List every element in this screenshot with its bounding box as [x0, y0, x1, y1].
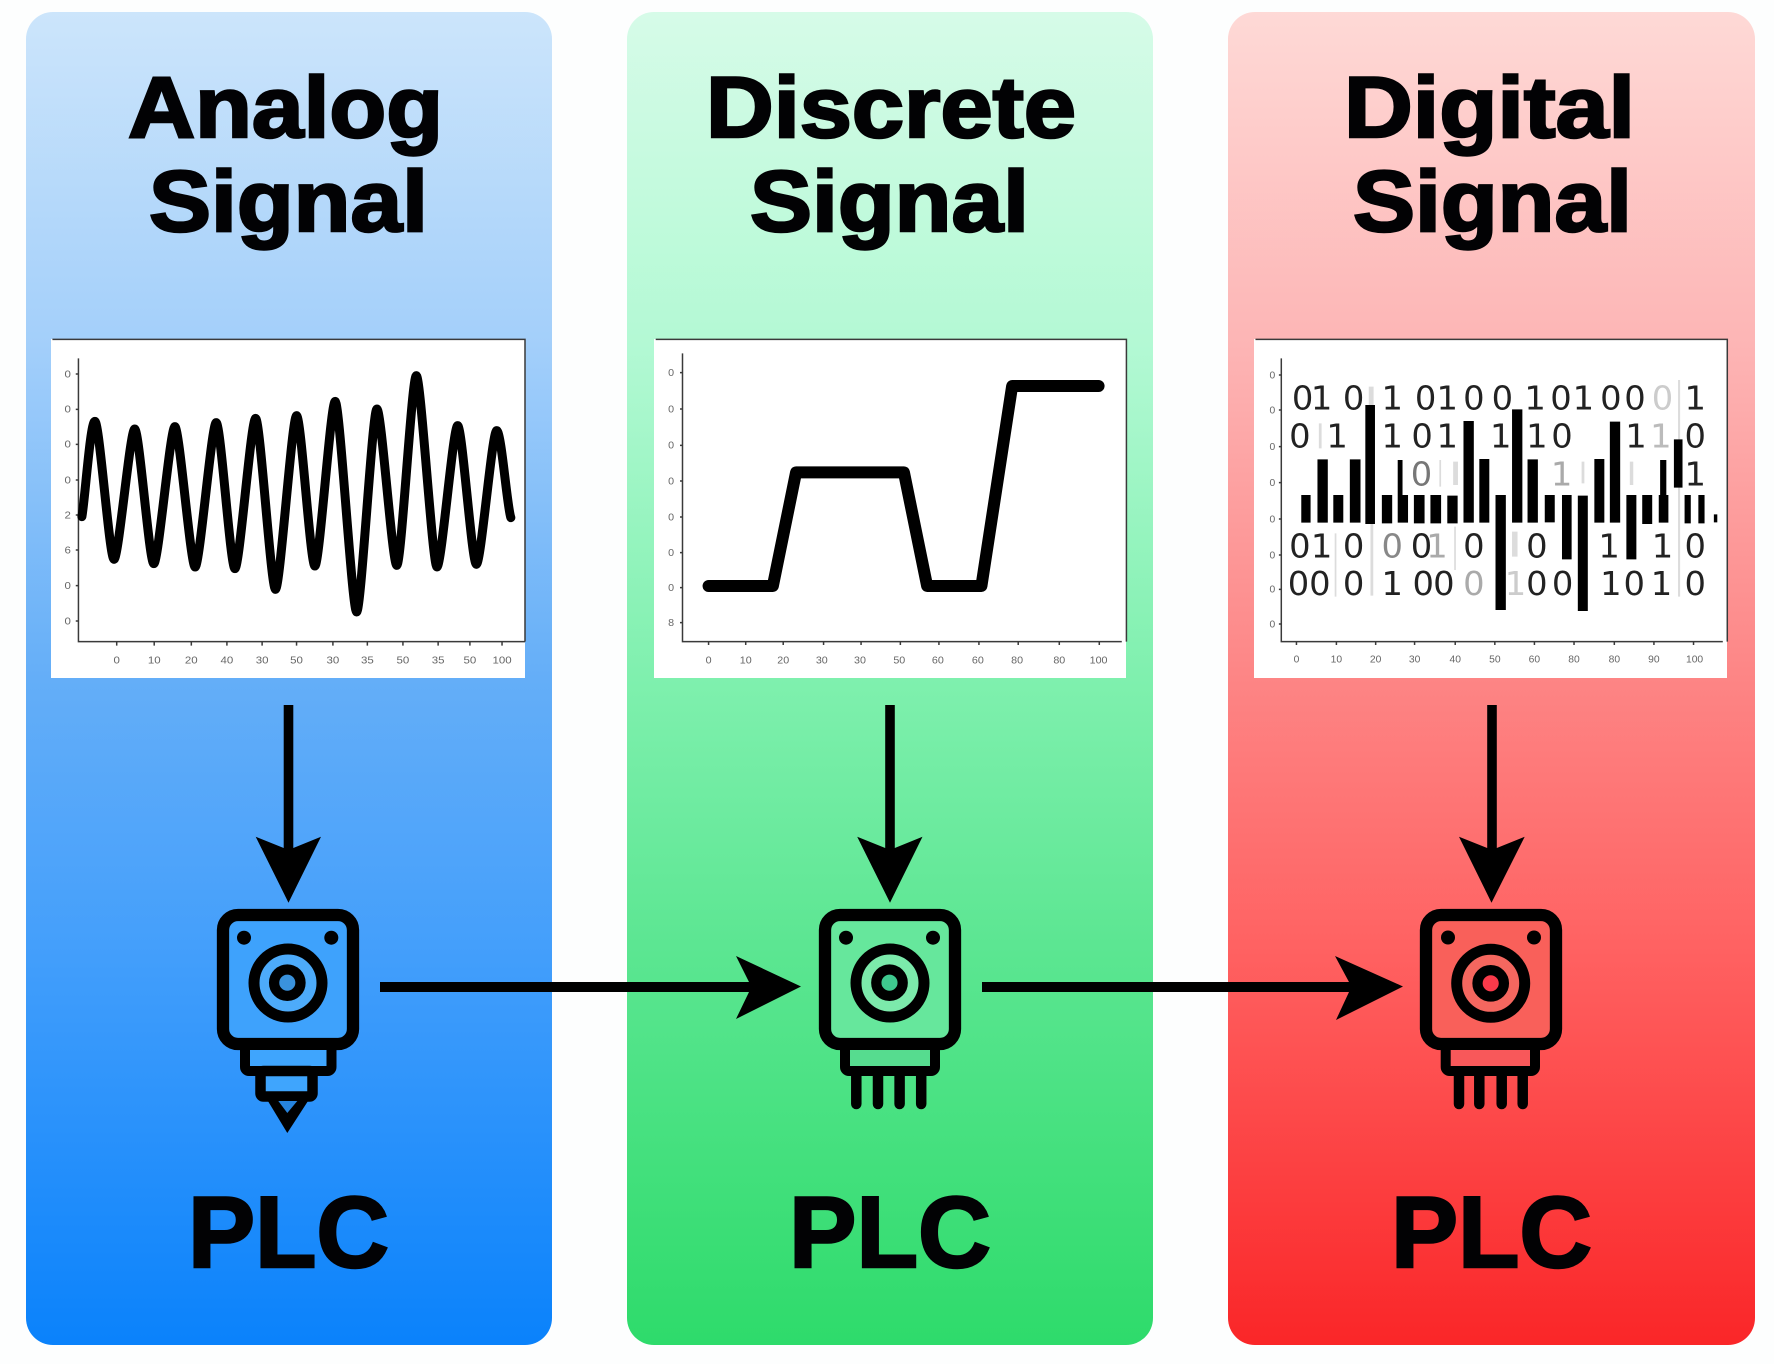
- chart: digital bits and bars: 0: [1269, 585, 1276, 596]
- chart: analog waveform: 0: [65, 439, 71, 450]
- chart: digital bits and bars: 0: [1269, 442, 1276, 453]
- chart: digital bits and bars: 20: [1370, 655, 1382, 666]
- chart: digital bits and bars: [1254, 339, 1727, 678]
- chart: digital bits and bars: 0: [1269, 514, 1276, 525]
- chart: discrete step signal: 0: [668, 548, 674, 559]
- chart: analog waveform: 50: [290, 655, 303, 666]
- chart: analog waveform: 2: [65, 510, 71, 521]
- chart: discrete step signal: 0: [706, 656, 712, 666]
- chart: analog waveform: [51, 339, 525, 678]
- chart: digital bits and bars: 60: [1529, 655, 1541, 666]
- chart: digital bits and bars: 0: [1269, 370, 1276, 381]
- icon: digital PLC module: [1426, 915, 1556, 1104]
- chart: discrete step signal: 60: [932, 656, 944, 666]
- chart: analog waveform: 10: [148, 655, 161, 666]
- chart: digital bits and bars: 1: [1551, 455, 1572, 494]
- heading: Digital Signal: Signal: [1353, 154, 1632, 250]
- chart: digital bits and bars: 0: [1463, 565, 1485, 603]
- chart: analog waveform: 0: [114, 655, 120, 666]
- chart: discrete step signal: 0: [668, 405, 674, 415]
- chart: digital bits and bars: 0: [1269, 405, 1276, 416]
- chart: discrete step signal: 30: [854, 656, 866, 666]
- arrow: discrete PLC to digital PLC: [982, 956, 1403, 1020]
- chart: digital bits and bars: 30: [1409, 655, 1421, 666]
- chart: digital bits and bars: 0110111010: [1289, 417, 1706, 455]
- chart: discrete step signal: 80: [1053, 656, 1065, 666]
- chart: analog waveform: 35: [361, 655, 374, 666]
- chart: digital bits and bars: 010000110: [1289, 527, 1706, 566]
- chart: discrete step signal: 80: [1011, 656, 1023, 666]
- heading: Analog Signal: Analog: [128, 60, 443, 156]
- chart: analog waveform: 30: [327, 655, 339, 666]
- chart: discrete step signal: 30: [816, 656, 828, 666]
- chart: digital bits and bars: 80: [1609, 655, 1620, 666]
- chart: digital bits and bars: 1: [1505, 565, 1526, 603]
- chart: discrete step signal: 20: [777, 656, 789, 666]
- chart: discrete step signal: 8: [668, 618, 674, 629]
- arrow: discrete chart to PLC: [857, 705, 922, 903]
- chart: digital bits and bars: 90: [1648, 655, 1660, 666]
- chart: digital bits and bars: 0: [1269, 619, 1276, 630]
- chart: digital bits and bars: 80: [1568, 655, 1580, 666]
- arrow: analog chart to PLC: [256, 705, 321, 903]
- chart: digital bits and bars: 0: [1269, 478, 1276, 489]
- heading: Discrete Signal: Signal: [750, 154, 1029, 250]
- heading: Analog Signal: [128, 60, 443, 250]
- chart: digital bits and bars: 1: [1426, 527, 1448, 566]
- chart: digital bits and bars: 1: [1650, 417, 1672, 455]
- chart: digital bits and bars: 50: [1489, 655, 1501, 666]
- heading: Analog Signal: Signal: [149, 154, 428, 250]
- icon: analog PLC module: [223, 915, 353, 1133]
- chart: analog waveform: 30: [256, 655, 269, 666]
- panel: analog signal: [26, 12, 552, 1345]
- label: PLC discrete: PLC: [789, 1177, 991, 1289]
- chart: digital bits and bars: 0: [1294, 655, 1300, 666]
- label: PLC analog: PLC: [188, 1177, 389, 1289]
- chart: digital bits and bars: 10: [1331, 655, 1343, 666]
- chart: analog waveform: 35: [432, 655, 445, 666]
- chart: discrete step signal: 0: [668, 441, 674, 452]
- chart: analog waveform: 40: [221, 655, 233, 666]
- arrow: digital chart to PLC: [1459, 705, 1525, 903]
- chart: discrete step signal: 0: [668, 368, 674, 379]
- heading: Digital Signal: Digital: [1344, 60, 1635, 156]
- chart: discrete step signal: 0: [668, 513, 674, 523]
- chart: analog waveform: 50: [464, 655, 476, 666]
- chart: discrete step signal: 60: [972, 656, 984, 666]
- label: PLC digital: PLC: [1391, 1177, 1592, 1289]
- chart: discrete step signal: 10: [740, 656, 752, 666]
- heading: Discrete Signal: [706, 60, 1076, 250]
- chart: analog waveform: 0: [65, 581, 71, 592]
- chart: digital bits and bars: 0: [1411, 455, 1432, 494]
- chart: analog waveform: 6: [65, 545, 71, 556]
- chart: digital bits and bars: 01010100101001: [1292, 379, 1706, 417]
- chart: digital bits and bars: 100: [1686, 655, 1704, 666]
- chart: digital bits and bars: 0: [1652, 379, 1673, 417]
- chart: analog waveform: 100: [492, 655, 512, 666]
- chart: analog waveform: 0: [65, 475, 71, 486]
- icon: discrete PLC module: [825, 915, 955, 1104]
- chart: digital bits and bars: 40: [1449, 655, 1461, 666]
- arrow: analog PLC to discrete PLC: [380, 956, 801, 1019]
- chart: digital bits and bars: 1: [1685, 455, 1706, 494]
- heading: Digital Signal: [1344, 60, 1635, 250]
- panel: discrete signal: [627, 12, 1153, 1345]
- chart: discrete step signal: 0: [668, 583, 674, 594]
- chart: discrete step signal: 50: [893, 656, 905, 666]
- panel: digital signal: [1228, 12, 1755, 1345]
- chart: analog waveform: 0: [65, 616, 71, 627]
- chart: discrete step signal: [654, 339, 1126, 678]
- chart: discrete step signal: 100: [1090, 656, 1108, 666]
- chart: analog waveform: 50: [397, 655, 409, 666]
- chart: analog waveform: 0: [65, 369, 71, 380]
- chart: digital bits and bars: 0: [1269, 550, 1276, 561]
- chart: discrete step signal: 0: [668, 477, 674, 487]
- chart: digital bits and bars: 0: [1381, 527, 1403, 566]
- heading: Discrete Signal: Discrete: [706, 60, 1076, 156]
- chart: analog waveform: 0: [65, 404, 71, 415]
- chart: digital bits and bars: 000100001010: [1288, 565, 1706, 603]
- chart: analog waveform: 20: [185, 655, 198, 666]
